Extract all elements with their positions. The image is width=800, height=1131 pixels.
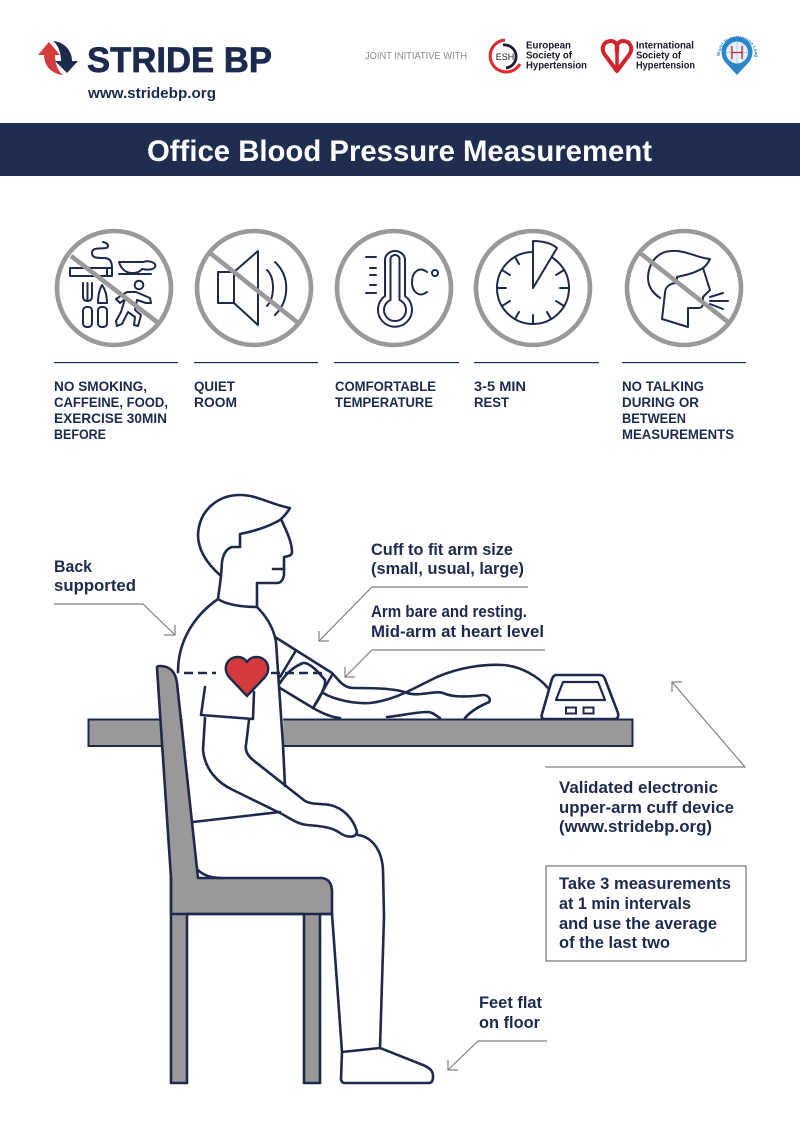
divider and label	[622, 362, 746, 442]
figure outline	[178, 495, 433, 1083]
callout: feet flat on floor: on floor	[479, 1014, 541, 1032]
callout: back supported: Back	[54, 558, 93, 576]
divider and label: TEMPERATURE	[335, 395, 433, 410]
title banner	[0, 123, 800, 176]
logo: World Hypertension League	[716, 36, 758, 75]
divider and label: MEASUREMENTS	[622, 427, 734, 442]
logo: European Society of Hypertension: ESH	[496, 52, 514, 62]
icon: smoking, cup, cutlery and runner crossed out	[57, 231, 171, 345]
divider and label: REST	[474, 395, 510, 410]
panel: no talking	[622, 231, 746, 442]
callout: cuff size: (small, usual, large)	[371, 560, 524, 578]
divider and label	[474, 362, 599, 410]
callout box: take 3 measurements: and use the average	[559, 915, 717, 933]
divider and label: NO SMOKING,	[54, 379, 147, 394]
heart level dashed line	[184, 672, 325, 674]
divider and label	[54, 362, 178, 442]
callout: feet flat on floor: Feet flat	[479, 994, 542, 1012]
divider and label: BETWEEN	[622, 411, 686, 426]
callout box: take 3 measurements: Take 3 measurements	[559, 875, 731, 893]
callout box: take 3 measurements: of the last two	[559, 934, 670, 952]
icon: talking head crossed out	[627, 231, 741, 345]
callout: validated device	[545, 682, 745, 836]
panel: quiet room	[194, 231, 318, 410]
logo: European Society of Hypertension: Society of	[526, 50, 572, 62]
callout: feet flat on floor	[448, 994, 547, 1070]
divider and label: EXERCISE 30MIN	[54, 411, 167, 426]
divider and label: DURING OR	[622, 395, 699, 410]
logo: European Society of Hypertension: Hypertension	[526, 60, 587, 72]
panel: comfortable temperature	[334, 231, 459, 410]
icon: clock with wedge	[476, 231, 590, 345]
logo: International Society of Hypertension: Hypertension	[636, 60, 695, 72]
illustration: seated patient at table	[88, 495, 632, 1083]
divider and label	[194, 362, 318, 410]
divider and label: QUIET	[194, 379, 236, 394]
icon: logo arrows	[38, 41, 78, 75]
callout: back supported	[54, 558, 175, 635]
icon: heart	[226, 657, 268, 696]
header: partner logos	[365, 36, 758, 75]
panel: no smoking, caffeine, food, exercise	[54, 231, 178, 442]
logo wordmark: STRIDE BP	[87, 41, 272, 80]
chair	[157, 666, 332, 1083]
panel: 3-5 min rest	[474, 231, 599, 410]
title: Office Blood Pressure Measurement	[147, 135, 652, 168]
icon: thermometer	[337, 231, 451, 345]
header: STRIDE BP logo	[38, 41, 272, 102]
divider and label: COMFORTABLE	[335, 379, 436, 394]
divider and label: NO TALKING	[622, 379, 704, 394]
body white fill	[178, 599, 433, 1083]
website: www.stridebp.org	[87, 85, 216, 102]
logo: International Society of Hypertension: Society of	[636, 50, 682, 62]
callout box: take 3 measurements: at 1 min intervals	[559, 895, 691, 913]
logo: International Society of Hypertension	[603, 40, 695, 72]
logo: European Society of Hypertension: European	[526, 40, 571, 52]
callout box: take 3 measurements	[546, 866, 746, 961]
arm, cuff and cable	[275, 637, 548, 718]
callout: cuff size	[319, 541, 528, 641]
divider and label: CAFFEINE, FOOD,	[54, 395, 168, 410]
callout: back supported: supported	[54, 577, 136, 595]
callout: validated device: Validated electronic	[559, 779, 718, 797]
callout: arm bare and resting: Arm bare and resting.	[371, 603, 527, 621]
divider and label: BEFORE	[54, 427, 106, 442]
callout: validated device: upper-arm cuff device	[559, 799, 734, 817]
callout: cuff size: Cuff to fit arm size	[371, 541, 513, 559]
divider and label	[334, 362, 459, 410]
logo: International Society of Hypertension: International	[636, 40, 694, 52]
callout: validated device: (www.stridebp.org)	[559, 818, 712, 836]
divider and label: 3-5 MIN	[474, 379, 526, 394]
callout: arm bare and resting: Mid-arm at heart level	[371, 623, 544, 641]
divider and label: ROOM	[194, 395, 237, 410]
logo: European Society of Hypertension	[490, 40, 587, 72]
joint initiative label: JOINT INITIATIVE WITH	[365, 51, 467, 62]
device: electronic monitor	[542, 675, 618, 719]
icon: speaker crossed out	[197, 231, 311, 345]
callout: arm bare and resting	[345, 603, 545, 677]
table	[88, 720, 632, 746]
